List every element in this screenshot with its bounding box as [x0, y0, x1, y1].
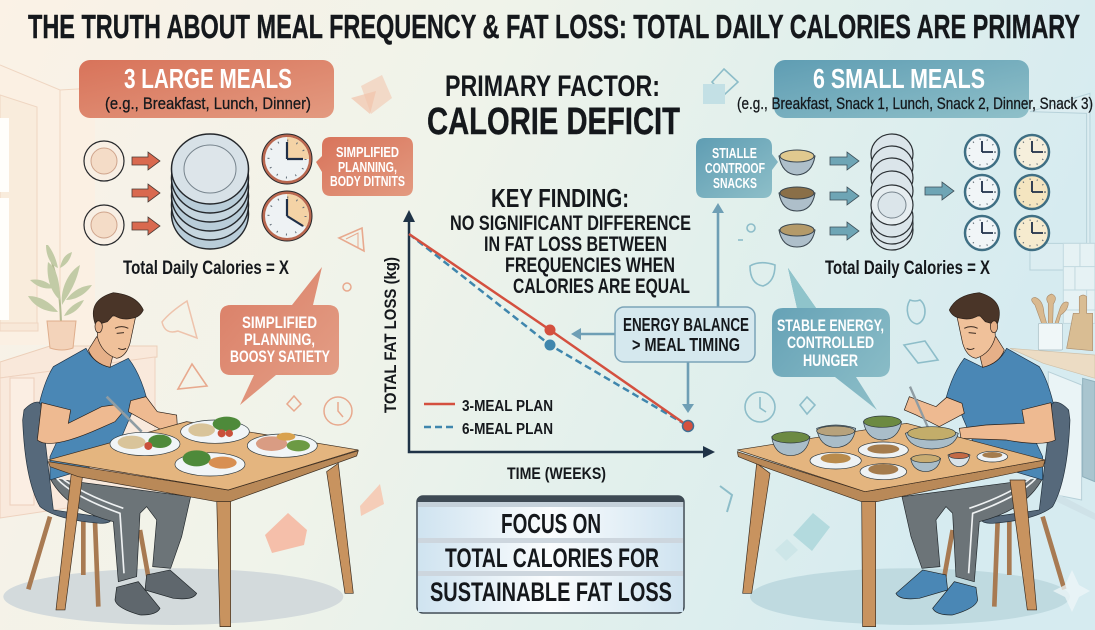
illustration: man with six small meals: [737, 293, 1070, 627]
panel: focus sign: [417, 496, 684, 613]
text: key finding: IN FAT LOSS BETWEEN: [484, 233, 667, 256]
panel: focus sign: FOCUS ON: [501, 508, 601, 539]
icon: large plate stack: [172, 134, 248, 249]
floor shadow: [3, 568, 343, 625]
callout: simplified planning, satiety: [220, 267, 339, 405]
panel: focus sign: TOTAL CALORIES FOR: [445, 543, 659, 573]
callout: stable controlled snacks: [696, 138, 778, 198]
callout: simplified planning top: PLANNING,: [338, 159, 397, 176]
callout: energy balance: ENERGY BALANCE: [623, 315, 749, 335]
arms: [904, 397, 1055, 443]
series: 6-meal plan: [409, 234, 688, 426]
text: key finding: NO SIGNIFICANT DIFFERENCE: [450, 212, 691, 235]
legend: 3-MEAL PLAN: [462, 398, 553, 415]
arms: [37, 397, 177, 443]
icon: small plate stack: [871, 134, 913, 250]
table: [48, 422, 358, 627]
icon: bowls: [779, 150, 815, 247]
illustration: man with three large meals: [3, 293, 358, 627]
callout: simplified planning top: [316, 137, 413, 196]
decorative shapes: right: [703, 69, 938, 561]
decorative shapes: left: [162, 75, 392, 553]
arrows: from energy balance box: [571, 203, 724, 413]
heading: 6 small meals: 6 SMALL MEALS: [813, 63, 985, 94]
panel: 3 large meals header: [79, 60, 334, 118]
callout: simplified planning top: SIMPLIFIED: [336, 144, 399, 161]
icon: orange arrows: [132, 152, 160, 235]
panel: 6 small meals header: [737, 60, 1093, 118]
icon: small plates: [84, 141, 124, 245]
heading: 3 large meals: 3 LARGE MEALS: [124, 63, 292, 94]
subheading: 3 meals examples: (e.g., Breakfast, Lunch, Dinner): [105, 94, 311, 113]
icon: 6 meals bowls to plate stack to clocks: [779, 134, 1049, 250]
shoes: [896, 570, 978, 615]
icon: sparkle watermark: [1053, 570, 1090, 612]
panel: focus sign: SUSTAINABLE FAT LOSS: [430, 577, 672, 607]
callout: stable energy: STABLE ENERGY,: [777, 316, 884, 335]
callout: stable controlled snacks: CONTROOF: [705, 161, 765, 177]
heading: primary factor: CALORIE DEFICIT: [427, 101, 680, 143]
callout: stable energy: HUNGER: [803, 351, 858, 370]
icon: 3 meal clock two: [262, 191, 312, 241]
icon: 3 meal clock one: [262, 134, 312, 184]
head: [949, 293, 1004, 367]
callout: simplified planning, satiety: BOOSY SATIETY: [230, 347, 330, 366]
icon: 3 meals plates to stack: [84, 134, 312, 249]
text: total daily calories left: Total Daily Calories = X: [123, 258, 289, 279]
bowls and small plates: [772, 416, 1008, 480]
callout: energy balance: [615, 307, 755, 362]
icon: six clocks: [965, 135, 1049, 250]
utensils and cutting board: [1032, 294, 1093, 351]
heading: primary factor: [427, 70, 680, 143]
legend: 6-MEAL PLAN: [462, 421, 553, 438]
chair: [944, 402, 1070, 607]
fork: [92, 397, 142, 463]
chair: [23, 402, 148, 607]
right kitchen backdrop: [1010, 93, 1095, 520]
series: 3-meal plan: [409, 234, 694, 432]
trousers: [50, 477, 191, 582]
text: total daily calories right: Total Daily Calories = X: [825, 258, 990, 279]
heading: primary factor: PRIMARY FACTOR:: [445, 70, 660, 103]
shirt: [946, 348, 1053, 480]
callout: simplified planning top: BODY DITNITS: [330, 173, 405, 190]
callout: stable energy: [772, 268, 890, 410]
spoon: [910, 387, 928, 428]
plates: [110, 417, 317, 476]
axis label: y: TOTAL FAT LOSS (kg): [381, 257, 400, 413]
icon: teal arrows: [830, 152, 954, 240]
callout: simplified planning, satiety: SIMPLIFIED: [242, 313, 317, 332]
mirrored man: [896, 293, 1070, 615]
trousers: [902, 477, 1043, 582]
line chart: [381, 210, 715, 483]
left kitchen room backdrop: [0, 65, 157, 518]
text: key finding: [450, 183, 691, 298]
callout: energy balance: > MEAL TIMING: [632, 335, 740, 355]
shoes: [115, 570, 197, 615]
legend: [424, 398, 553, 438]
text: key finding: CALORIES ARE EQUAL: [513, 275, 690, 298]
callout: stable energy: CONTROLLED: [787, 333, 874, 352]
callout: stable controlled snacks: SNACKS: [713, 176, 757, 192]
head: [88, 293, 143, 367]
text: key finding: KEY FINDING:: [491, 183, 629, 213]
axis label: x: TIME (WEEKS): [507, 464, 606, 483]
chart axes: [403, 210, 715, 458]
callout: stable controlled snacks: STIALLE: [712, 146, 757, 162]
shirt: [39, 348, 147, 480]
text: key finding: FREQUENCIES WHEN: [505, 254, 675, 277]
table: [737, 423, 1045, 627]
floor shadow: [750, 568, 1070, 625]
plant: [28, 245, 92, 350]
callout: simplified planning, satiety: PLANNING,: [244, 330, 315, 349]
